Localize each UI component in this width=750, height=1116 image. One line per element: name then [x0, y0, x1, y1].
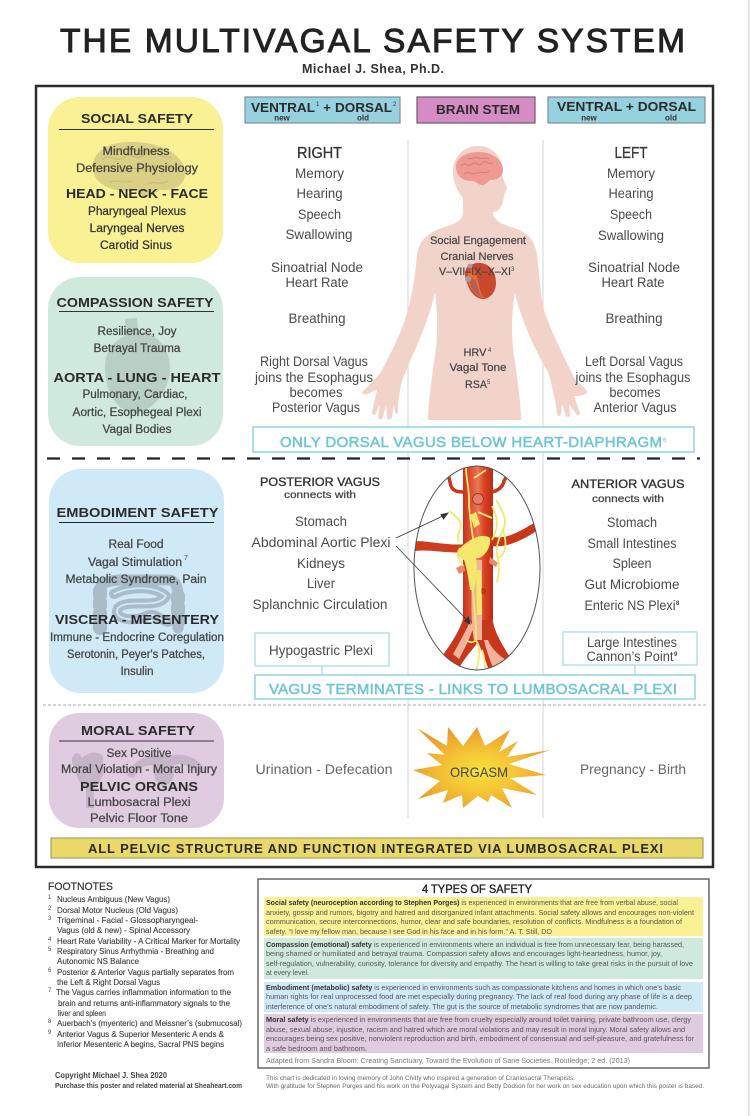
- panel: moral safety: [49, 713, 224, 828]
- panel: compassion safety: [48, 277, 223, 446]
- panel: social safety: [48, 97, 223, 263]
- list: Betrayal Trauma: [94, 343, 181, 355]
- band: embodiment: interference of one’s natural embodiment of safety. The gut is the source of metabolic syndromes that are now pandemic.: [266, 1002, 658, 1011]
- column: right functions: Hearing: [296, 186, 342, 201]
- column: right functions: [254, 145, 373, 415]
- copyright: Copyright Michael J. Shea 2020: [55, 1071, 168, 1080]
- column: left functions: Anterior Vagus: [594, 400, 677, 415]
- header: ventral + dorsal right: 2: [393, 102, 397, 108]
- heading: COMPASSION SAFETY: [56, 295, 214, 310]
- callout: vagus terminates: VAGUS TERMINATES - LINKS TO LUMBOSACRAL PLEXI: [269, 681, 677, 698]
- header: ventral + dorsal right: [245, 97, 400, 123]
- column: anterior vagus: 8: [676, 601, 680, 607]
- column: left functions: Hearing: [608, 186, 654, 201]
- band: social: safety. “I love my fellow man, because I see God in his face and in his form.” A. T. Still, DO: [266, 927, 552, 936]
- footnotes: liver and spleen: [58, 1009, 106, 1018]
- footnotes: 1: [48, 895, 52, 901]
- copyright: [55, 1071, 242, 1090]
- dedication: This chart is dedicated in loving memory of John Chitty who inspired a generation of Craniosacral Therapists.: [266, 1076, 575, 1082]
- band: compassion: self-regulation, vulnerability, curiosity, tolerance for diversity and empathy. The heart is willing to take great risks in the pursuit of love: [266, 959, 693, 968]
- header: ventral + dorsal right: old: [357, 114, 369, 122]
- footnotes: Nucleus Ambiguus (New Vagus): [57, 895, 170, 904]
- column: anterior vagus: Spleen: [612, 556, 652, 571]
- column: anterior vagus: [572, 477, 684, 613]
- list: Immune - Endocrine Coregulation: [50, 632, 224, 644]
- body labels: Cranial Nerves: [440, 251, 514, 263]
- band: social: communication, secure interconnections, humor, clear and safe boundaries, resolution of conflicts. Mindfulness is a foundation of: [266, 917, 683, 926]
- column: posterior vagus: Kidneys: [297, 556, 345, 571]
- band: social: [264, 897, 703, 936]
- body labels: RSA: [465, 379, 488, 391]
- column: anterior vagus: connects with: [592, 494, 664, 505]
- list: Mindfulness: [102, 146, 170, 158]
- label: urination: Urination - Defecation: [256, 762, 392, 777]
- header: ventral + dorsal right: DORSAL: [335, 100, 392, 115]
- header: ventral + dorsal right: +: [323, 100, 331, 115]
- main frame: [36, 86, 713, 867]
- column: posterior vagus: Liver: [307, 576, 335, 591]
- list: [50, 539, 224, 678]
- band: compassion: at every level.: [266, 968, 309, 977]
- column: right functions: Breathing: [288, 311, 346, 326]
- list: Moral Violation - Moral Injury: [61, 764, 217, 776]
- footnotes: Inferior Mesenteric A begins, Sacral PNS begins: [57, 1040, 224, 1049]
- footnotes: Heart Rate Variability - A Critical Marker for Mortality: [57, 937, 240, 946]
- footnotes: Trigeminal - Facial - Glossopharyngeal-: [57, 916, 198, 925]
- list: [61, 748, 217, 825]
- header: ventral + dorsal left: new: [581, 114, 598, 122]
- heading: EMBODIMENT SAFETY: [56, 505, 219, 520]
- callout: only dorsal vagus: 6: [663, 438, 667, 444]
- column: right functions: Posterior Vagus: [272, 400, 360, 415]
- icon: heart watermark: [105, 318, 170, 413]
- column: left functions: becomes: [610, 385, 661, 400]
- footnotes: 3: [48, 916, 52, 922]
- band: social: Social safety (neuroception according to Stephen Porges) is experienced in environments that are free from verbal abuse, social: [266, 898, 678, 907]
- heading: MORAL SAFETY: [81, 723, 195, 738]
- body labels: Vagal Tone: [450, 362, 506, 374]
- band: moral: abuse, sexual abuse, injustice, racism and hatred which are moral violations and may result in moral injury. Moral safety allows and: [266, 1025, 685, 1034]
- body labels: 5: [487, 380, 491, 386]
- column: left functions: Swallowing: [598, 228, 664, 243]
- list: Lumbosacral Plexi: [88, 797, 190, 809]
- list: Pelvic Floor Tone: [90, 813, 188, 825]
- list: Metabolic Syndrome, Pain: [66, 574, 206, 586]
- copyright: Purchase this poster and related material at Sheaheart.com: [55, 1083, 242, 1090]
- heading: SOCIAL SAFETY: [81, 111, 193, 126]
- band: moral: Moral safety is experienced in environments that are free from cruelty especially around toilet training, private bathroom use, clergy: [266, 1015, 691, 1024]
- column: right functions: joins the Esophagus: [254, 370, 373, 385]
- callout: only dorsal vagus: [253, 427, 694, 452]
- icon: intestines watermark: [100, 580, 178, 628]
- band: embodiment: [264, 982, 703, 1012]
- band: moral: [264, 1014, 703, 1053]
- footnotes: 8: [48, 1019, 52, 1025]
- footnotes: Autonomic NS Balance: [57, 957, 140, 966]
- list: 7: [184, 555, 188, 562]
- list: Insulin: [120, 666, 154, 678]
- column: posterior vagus: [252, 475, 390, 612]
- band: embodiment: Embodiment (metabolic) safety is experienced in environments such as compassionate kitchens and homes in which one’s basic: [266, 983, 681, 992]
- column: left functions: [575, 145, 691, 415]
- header: ventral + dorsal left: old: [665, 114, 677, 122]
- body labels: HRV: [464, 347, 487, 359]
- footnotes: The Vagus carries inflammation information to the: [56, 988, 232, 997]
- column: anterior vagus: ANTERIOR VAGUS: [572, 477, 684, 491]
- band: compassion: Compassion (emotional) safety is experienced in environments where an individual is free from unnecessary fear, being harassed,: [266, 940, 684, 949]
- footnotes: the Left & Right Dorsal Vagus: [57, 978, 160, 987]
- heading: 4 TYPES OF SAFETY: [422, 882, 532, 896]
- illustration: human body: [362, 146, 587, 420]
- column: right functions: Memory: [295, 166, 344, 181]
- list: Resilience, Joy: [98, 326, 177, 338]
- column: right functions: Heart Rate: [286, 275, 348, 290]
- column: posterior vagus: POSTERIOR VAGUS: [260, 475, 380, 489]
- column: anterior vagus: Gut Microbiome: [584, 577, 680, 592]
- footnotes: 6: [48, 968, 52, 974]
- list: Pulmonary, Cardiac,: [82, 389, 188, 401]
- column: left functions: Memory: [607, 166, 655, 181]
- banner: pelvic structure: [51, 838, 703, 858]
- box: hypogastric plexi: [255, 633, 389, 666]
- banner: pelvic structure: ALL PELVIC STRUCTURE AND FUNCTION INTEGRATED VIA LUMBOSACRAL PLEXI: [88, 841, 663, 856]
- column: right functions: Swallowing: [286, 227, 352, 242]
- list: [54, 326, 221, 436]
- footnotes: Auerbach’s (myenteric) and Meissner’s (submucosal): [57, 1019, 242, 1028]
- panel: 4 types of safety: [258, 879, 709, 1068]
- icon: brain: [456, 152, 503, 185]
- footnotes: 2: [48, 906, 52, 912]
- footnotes: 7: [48, 988, 52, 994]
- box: large intestines: [563, 632, 697, 665]
- column: anterior vagus: Small Intestines: [588, 536, 677, 551]
- column: right functions: Right Dorsal Vagus: [260, 354, 368, 369]
- column: left functions: Speech: [610, 207, 652, 222]
- list: Serotonin, Peyer's Patches,: [67, 649, 205, 661]
- header: ventral + dorsal right: VENTRAL: [251, 100, 315, 115]
- callout: only dorsal vagus: ONLY DORSAL VAGUS BELOW HEART-DIAPHRAGM: [280, 434, 662, 451]
- list: Laryngeal Nerves: [90, 223, 185, 235]
- header: ventral + dorsal right: 1: [316, 102, 320, 108]
- column: posterior vagus: Abdominal Aortic Plexi: [252, 535, 390, 550]
- column: right functions: Sinoatrial Node: [271, 260, 363, 275]
- panel: embodiment safety: [49, 469, 224, 693]
- body labels: 4: [488, 348, 492, 354]
- header: brain stem: [417, 97, 535, 123]
- illustration: abdominal aorta with vagal plexi: [414, 460, 540, 672]
- footnotes: Anterior Vagus & Superior Mesenteric A ends &: [57, 1030, 225, 1039]
- box: large intestines: Large Intestines: [587, 635, 677, 650]
- list: Vagal Stimulation: [88, 557, 182, 569]
- list: Defensive Physiology: [76, 163, 198, 175]
- box: hypogastric plexi: Hypogastric Plexi: [269, 643, 373, 658]
- header: ventral + dorsal left: VENTRAL + DORSAL: [557, 99, 696, 114]
- column: posterior vagus: Stomach: [295, 514, 347, 529]
- band: compassion: being shamed or humiliated and betrayal trauma. Compassion safety allows and encourages light-heartedness, humor, joy,: [266, 949, 662, 958]
- header: ventral + dorsal left: [548, 97, 705, 123]
- icon: brain watermark: [93, 142, 185, 197]
- band: social: anxiety, gossip and rumors, bigotry and hatred and disorganized infant attachments. Social safety allows and encourages non-violent: [266, 908, 695, 917]
- list: Aortic, Esophegeal Plexi: [72, 407, 202, 419]
- column: posterior vagus: Splanchnic Circulation: [252, 597, 388, 612]
- box: large intestines: Cannon’s Point: [586, 649, 674, 664]
- column: left functions: Sinoatrial Node: [588, 260, 680, 275]
- body labels: 3: [511, 267, 515, 273]
- footnotes: 4: [48, 937, 52, 943]
- column: left functions: Breathing: [606, 311, 662, 326]
- icon: pelvic organs watermark: [72, 752, 206, 808]
- footnotes: 5: [48, 947, 52, 953]
- footnotes: 9: [48, 1030, 52, 1036]
- list: AORTA - LUNG - HEART: [54, 370, 221, 385]
- body labels: [430, 235, 526, 391]
- title: THE MULTIVAGAL SAFETY SYSTEM: [60, 23, 685, 60]
- footnotes: Respiratory Sinus Arrhythmia - Breathing and: [57, 947, 214, 956]
- list: HEAD - NECK - FACE: [66, 186, 208, 201]
- column: right functions: becomes: [290, 385, 343, 400]
- band: compassion: [264, 938, 703, 979]
- footnotes: [48, 881, 242, 1049]
- callout: vagus terminates: [255, 675, 695, 699]
- band: embodiment: human rights for real unprocessed food are met especially during pregnancy. The lack of real food during any phase of life is a deep: [266, 992, 692, 1001]
- list: Vagal Bodies: [102, 424, 172, 436]
- footnotes: Posterior & Anterior Vagus partially separates from: [57, 968, 234, 977]
- source: Adapted from Sandra Bloom: Creating Sanctuary, Toward the Evolution of Sane Societies. Routledge; 2 ed. (2013): [266, 1056, 630, 1065]
- icon: starburst: ORGASM: [450, 764, 508, 780]
- label: pregnancy: Pregnancy - Birth: [580, 762, 686, 777]
- column: anterior vagus: Stomach: [607, 515, 657, 530]
- column: left functions: joins the Esophagus: [575, 370, 691, 385]
- arrow: plexi to upper plexus: [396, 513, 448, 538]
- header: brain stem: BRAIN STEM: [436, 102, 520, 117]
- footnotes: Vagus (old & new) - Spinal Accessory: [57, 926, 190, 935]
- list: VISCERA - MESENTERY: [55, 612, 219, 627]
- dedication: [266, 1076, 704, 1090]
- dedication: With gratitude for Stephen Porges and his work on the Polyvagal System and Betty Dodson for her work on sex education upon which this poster is based.: [266, 1084, 704, 1090]
- list: Pharyngeal Plexus: [88, 206, 186, 218]
- column dividers: [408, 140, 543, 818]
- box: large intestines: 9: [674, 652, 678, 658]
- icon: heart: [465, 263, 496, 299]
- author: Michael J. Shea, Ph.D.: [302, 62, 444, 76]
- icon: starburst: [413, 727, 550, 808]
- column: left functions: Left Dorsal Vagus: [585, 354, 683, 369]
- band: moral: a safe bedroom and bathroom.: [266, 1044, 367, 1053]
- body labels: Social Engagement: [430, 235, 526, 247]
- header: ventral + dorsal right: new: [274, 114, 291, 122]
- list: [66, 146, 208, 252]
- column: right functions: RIGHT: [297, 145, 342, 162]
- column: left functions: LEFT: [614, 145, 648, 162]
- list: Real Food: [108, 539, 164, 551]
- column: left functions: Heart Rate: [602, 275, 664, 290]
- column: posterior vagus: connects with: [284, 490, 356, 501]
- list: Carotid Sinus: [100, 240, 172, 252]
- footnotes: Dorsal Motor Nucleus (Old Vagus): [57, 906, 178, 915]
- band: moral: encourages being sex positive, nonviolent reproduction and birth, embodiment of consensual and self-pleasure, and gratefulness for: [266, 1034, 694, 1043]
- list: Sex Positive: [106, 748, 172, 760]
- column: right functions: Speech: [298, 207, 341, 222]
- body labels: V–VII–IX–X–XI: [439, 266, 511, 278]
- footnotes: brain and returns anti-inflammatory signals to the: [58, 999, 231, 1008]
- footnotes: FOOTNOTES: [48, 881, 113, 893]
- column: anterior vagus: Enteric NS Plexi: [584, 598, 676, 613]
- arrow: plexi to lower plexus: [396, 546, 470, 624]
- list: PELVIC ORGANS: [80, 779, 198, 794]
